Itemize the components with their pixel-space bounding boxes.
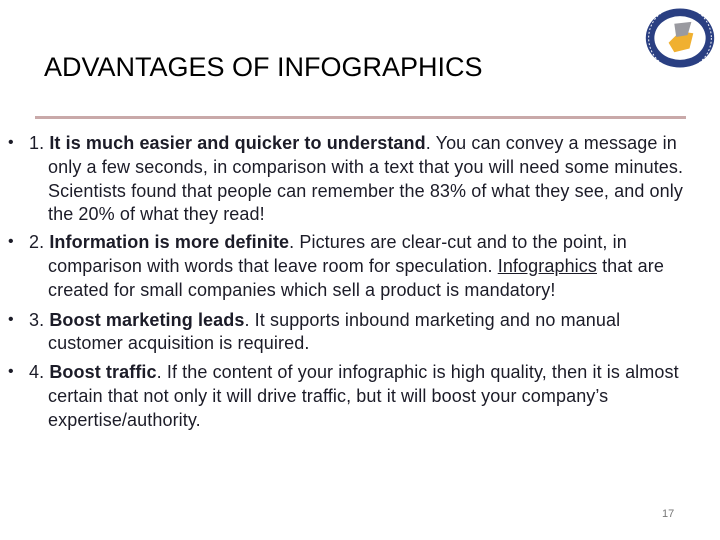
text block: bullet list: 1. It is much easier and quicker to understand. You can convey a message in xyxy=(29,133,677,153)
text block: bullet list: 2. Information is more definite. Pictures are clear-cut and to the point, in xyxy=(29,232,627,252)
text block: bullet list: comparison with words that leave room for speculation. Infographics that are xyxy=(48,256,664,276)
title: ADVANTAGES OF INFOGRAPHICS xyxy=(44,52,483,82)
page number: 17 xyxy=(662,508,674,520)
text block: bullet list: certain that not only it will drive traffic, but it will boost your company’s xyxy=(48,386,608,406)
text block: bullet list: expertise/authority. xyxy=(48,410,201,430)
text block: bullet list: only a few seconds, in comparison with a text that you will need some minutes. xyxy=(48,157,683,177)
text block: bullet list: the 20% of what they read! xyxy=(48,204,265,224)
text block: bullet list: created for small companies which sell a product is mandatory! xyxy=(48,280,555,300)
text block: bullet list: • xyxy=(8,134,14,151)
text block: bullet list: 3. Boost marketing leads. It supports inbound marketing and no manual xyxy=(29,310,620,330)
text block: bullet list: Scientists found that people can remember the 83% of what they see, and only xyxy=(48,181,683,201)
text block: bullet list: • xyxy=(8,363,14,380)
text block: bullet list: customer acquisition is required. xyxy=(48,333,309,353)
icon: logo xyxy=(646,8,714,68)
text block: bullet list: • xyxy=(8,233,14,250)
text block: bullet list: 4. Boost traffic. If the content of your infographic is high quality, then it is almost xyxy=(29,362,679,382)
text block: bullet list xyxy=(8,133,683,430)
text block: bullet list: • xyxy=(8,311,14,328)
